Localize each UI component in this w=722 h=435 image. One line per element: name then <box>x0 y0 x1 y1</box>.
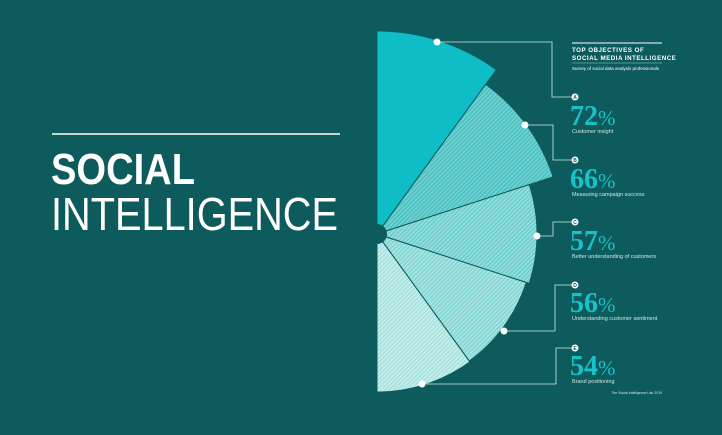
text: Brand positioning <box>572 379 615 385</box>
legend header: Survey of social data analysis professionals <box>572 66 660 71</box>
footer: The Social Intelligence Lab 2019 <box>611 391 662 395</box>
wedge E <box>377 234 470 392</box>
connectors <box>422 42 572 384</box>
wedge D <box>377 234 526 361</box>
stats: 56% <box>570 288 616 319</box>
stats: 54% <box>570 351 616 382</box>
marker dots <box>418 38 578 388</box>
legend header: SOCIAL MEDIA INTELLIGENCE <box>572 55 676 62</box>
marker dots: A <box>573 95 577 101</box>
marker dots: D <box>573 283 577 289</box>
title <box>51 134 340 240</box>
chart: half-rose wedges <box>367 31 553 392</box>
wedge B <box>377 84 553 234</box>
stats: 57% <box>570 226 616 257</box>
marker dots: B <box>573 158 577 164</box>
wedge C <box>377 185 537 283</box>
title: INTELLIGENCE <box>51 188 338 240</box>
marker dots: E <box>573 346 577 352</box>
text: Understanding customer sentiment <box>572 316 658 322</box>
stats: 72% <box>570 101 616 132</box>
text: Customer insight <box>572 129 614 135</box>
stats: 66% <box>570 164 616 195</box>
legend header: TOP OBJECTIVES OF <box>572 47 644 54</box>
text: Measuring campaign success <box>572 192 645 198</box>
marker dots: C <box>573 220 577 226</box>
wedge A <box>377 31 496 234</box>
legend header <box>572 43 676 71</box>
stats <box>570 101 616 382</box>
title: SOCIAL <box>51 145 195 194</box>
text: Better understanding of customers <box>572 254 656 260</box>
